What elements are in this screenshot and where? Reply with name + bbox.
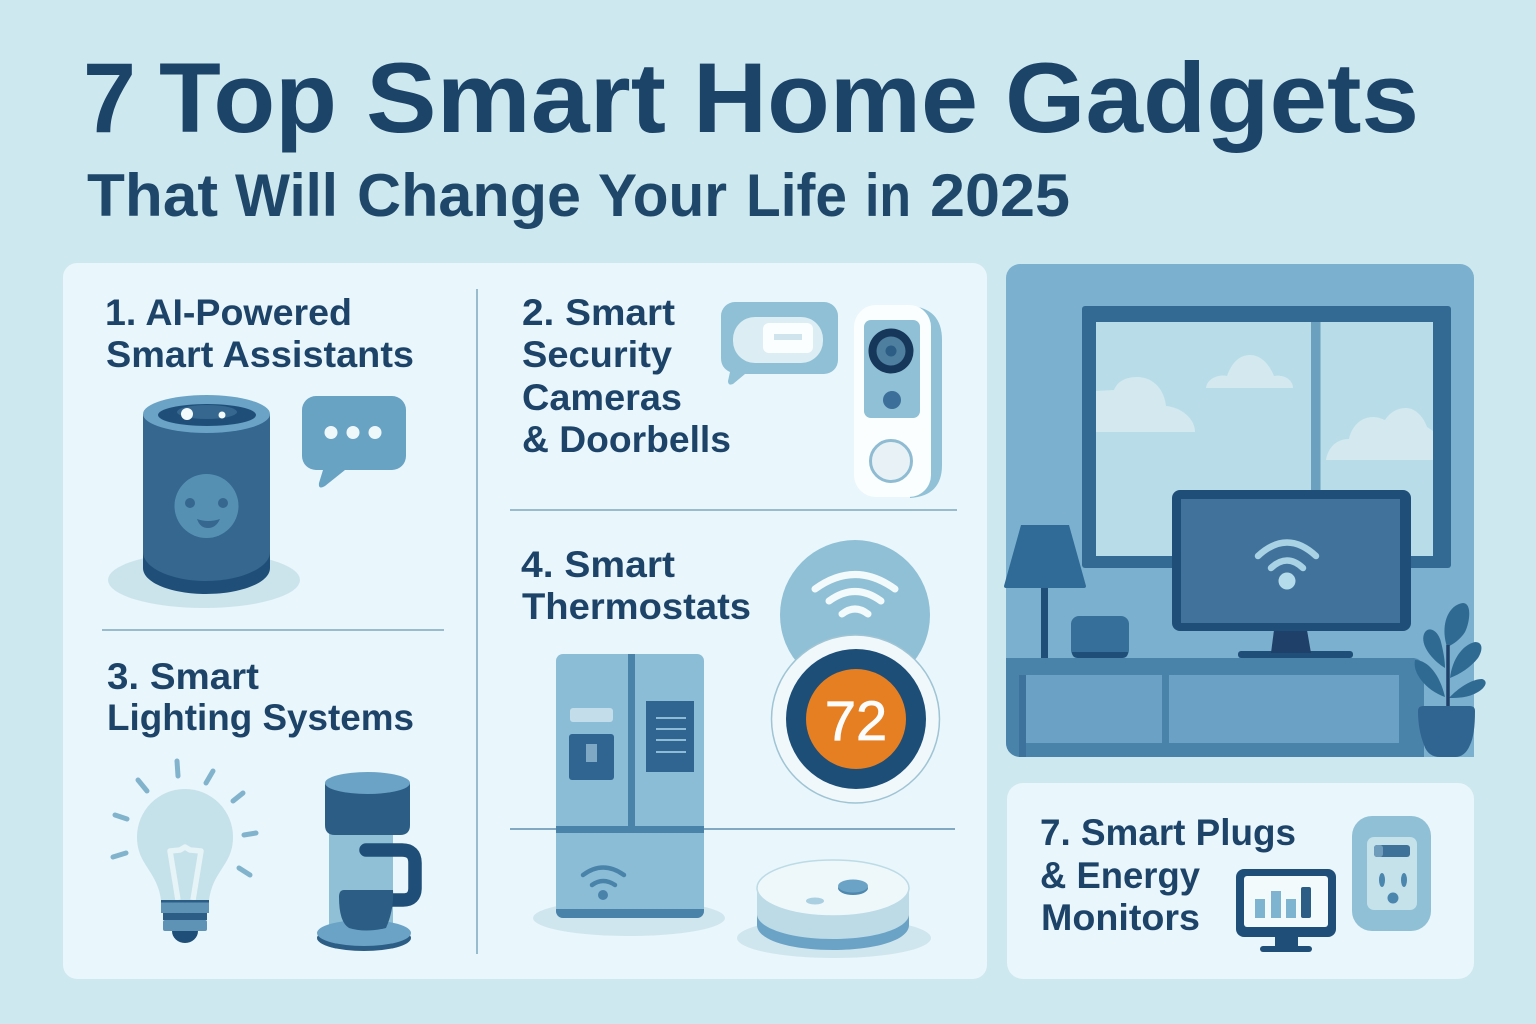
icon: speech bubble — [302, 396, 406, 487]
lamp — [1004, 525, 1086, 658]
panel: living room illustration — [1004, 264, 1486, 757]
icon: camera message bubble — [721, 302, 838, 385]
smart speaker puck — [1071, 616, 1129, 658]
heading: smart plugs and energy monitors: & Energy — [1040, 855, 1200, 896]
icon: video doorbell — [854, 305, 942, 498]
icon: smart coffee maker — [317, 772, 415, 951]
icon: smart plug — [1352, 816, 1431, 931]
title: Top — [159, 42, 337, 153]
icon: smart fridge — [533, 654, 725, 936]
heading: smart thermostats — [521, 544, 751, 627]
heading: smart security cameras and doorbells — [522, 292, 731, 460]
heading: smart plugs and energy monitors: 7. Smart Plugs — [1040, 812, 1296, 853]
heading: smart plugs and energy monitors — [1040, 812, 1296, 938]
icon: smart speaker — [108, 395, 300, 608]
heading: smart plugs and energy monitors: Monitors — [1041, 897, 1200, 938]
plant — [1415, 603, 1486, 757]
title: Gadgets — [1005, 42, 1419, 153]
subtitle: Change — [357, 162, 581, 229]
title: Home — [693, 42, 978, 153]
subtitle: That — [87, 162, 218, 229]
heading: smart thermostats: Thermostats — [522, 586, 751, 627]
heading: AI-powered smart assistants — [105, 292, 414, 375]
icon: robot vacuum — [737, 860, 931, 958]
subtitle: Will — [235, 162, 338, 229]
panel: main gadgets — [63, 263, 987, 979]
icon: light bulb — [113, 761, 256, 943]
title — [83, 42, 1419, 153]
icon: thermostat: 72 — [825, 689, 887, 752]
title: 7 — [83, 42, 136, 153]
heading: smart security cameras and doorbells: & Doorbells — [522, 419, 731, 460]
window — [1082, 306, 1451, 568]
subtitle: Life — [746, 162, 847, 229]
heading: smart lighting systems — [107, 656, 414, 738]
icon: wifi — [1258, 542, 1316, 590]
subtitle: Your — [598, 162, 727, 229]
icon: wifi circle — [780, 540, 930, 690]
subtitle: in — [865, 162, 911, 229]
panel: smart plugs — [1007, 783, 1474, 979]
heading: AI-powered smart assistants: 1. AI-Powered — [105, 292, 352, 333]
subtitle: 2025 — [930, 162, 1070, 229]
title: Smart — [366, 42, 666, 153]
heading: smart security cameras and doorbells: 2. Smart — [522, 292, 675, 333]
television — [1172, 490, 1411, 658]
heading: smart lighting systems: Lighting Systems — [107, 697, 414, 738]
cabinet — [1006, 658, 1424, 757]
heading: smart thermostats: 4. Smart — [521, 544, 675, 585]
subtitle — [87, 162, 1070, 229]
heading: smart security cameras and doorbells: Security — [522, 334, 672, 375]
heading: smart security cameras and doorbells: Cameras — [522, 377, 682, 418]
heading: smart lighting systems: 3. Smart — [107, 656, 259, 697]
icon: energy monitor — [1236, 869, 1336, 952]
icon: thermostat — [772, 635, 940, 803]
heading: AI-powered smart assistants: Smart Assistants — [106, 334, 414, 375]
